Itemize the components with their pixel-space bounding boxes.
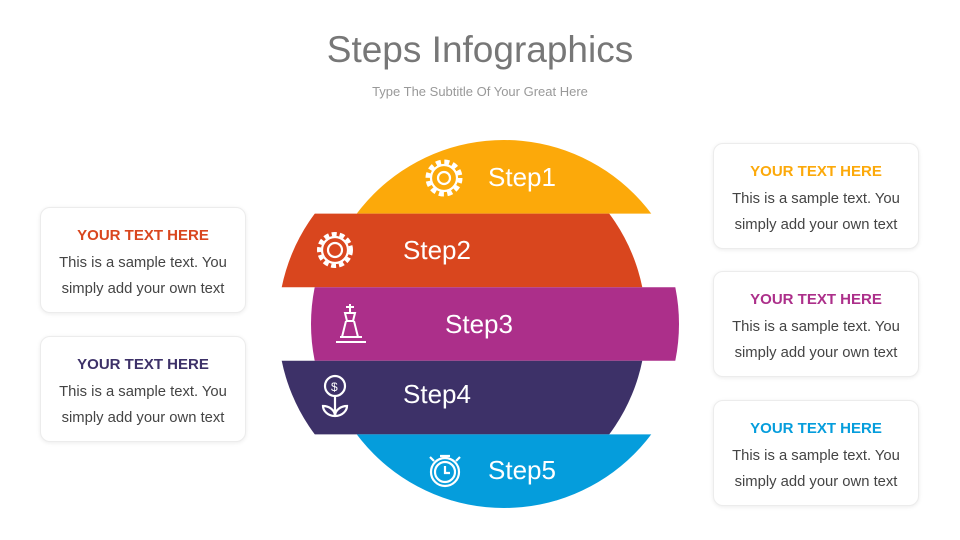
- step5 band: Step5: [488, 455, 556, 485]
- card right 2: This is a sample text. You: [732, 319, 900, 335]
- card right 1: This is a sample text. You: [732, 191, 900, 207]
- card left 2: This is a sample text. You: [59, 384, 227, 400]
- card left 1: [40, 207, 246, 313]
- step3 band: [311, 287, 679, 361]
- card left 1: This is a sample text. You: [59, 255, 227, 271]
- card right 1: YOUR TEXT HERE: [750, 163, 882, 180]
- card right 1: [713, 143, 919, 249]
- card right 2: YOUR TEXT HERE: [750, 291, 882, 308]
- title: Steps Infographics: [327, 29, 633, 70]
- step3 band: Step3: [445, 309, 513, 339]
- subtitle: Type The Subtitle Of Your Great Here: [372, 84, 588, 99]
- card left 2: simply add your own text: [62, 410, 224, 426]
- icon: gear wrench: [319, 234, 351, 266]
- card left 1: YOUR TEXT HERE: [77, 227, 209, 244]
- card right 3: YOUR TEXT HERE: [750, 420, 882, 437]
- circle steps chart: [282, 140, 679, 508]
- card right 2: [713, 271, 919, 377]
- card left 2: YOUR TEXT HERE: [77, 356, 209, 373]
- step2 band: [282, 214, 642, 288]
- card left 2: [40, 336, 246, 442]
- step4 band: [282, 360, 642, 434]
- step5 band: [356, 434, 652, 508]
- step1 band: [356, 140, 652, 214]
- card right 3: This is a sample text. You: [732, 448, 900, 464]
- card right 3: [713, 400, 919, 506]
- icon: money plant: [323, 376, 347, 416]
- card left 1: simply add your own text: [62, 281, 224, 297]
- icon: gear: [428, 162, 460, 194]
- card right 2: simply add your own text: [735, 345, 897, 361]
- step2 band: Step2: [403, 235, 471, 265]
- step1 band: Step1: [488, 162, 556, 192]
- step4 band: Step4: [403, 379, 471, 409]
- card right 1: simply add your own text: [735, 217, 897, 233]
- card right 3: simply add your own text: [735, 474, 897, 490]
- icon: money plant: $: [331, 380, 338, 394]
- icon: chess king: [336, 304, 366, 342]
- icon: stopwatch: [430, 456, 460, 486]
